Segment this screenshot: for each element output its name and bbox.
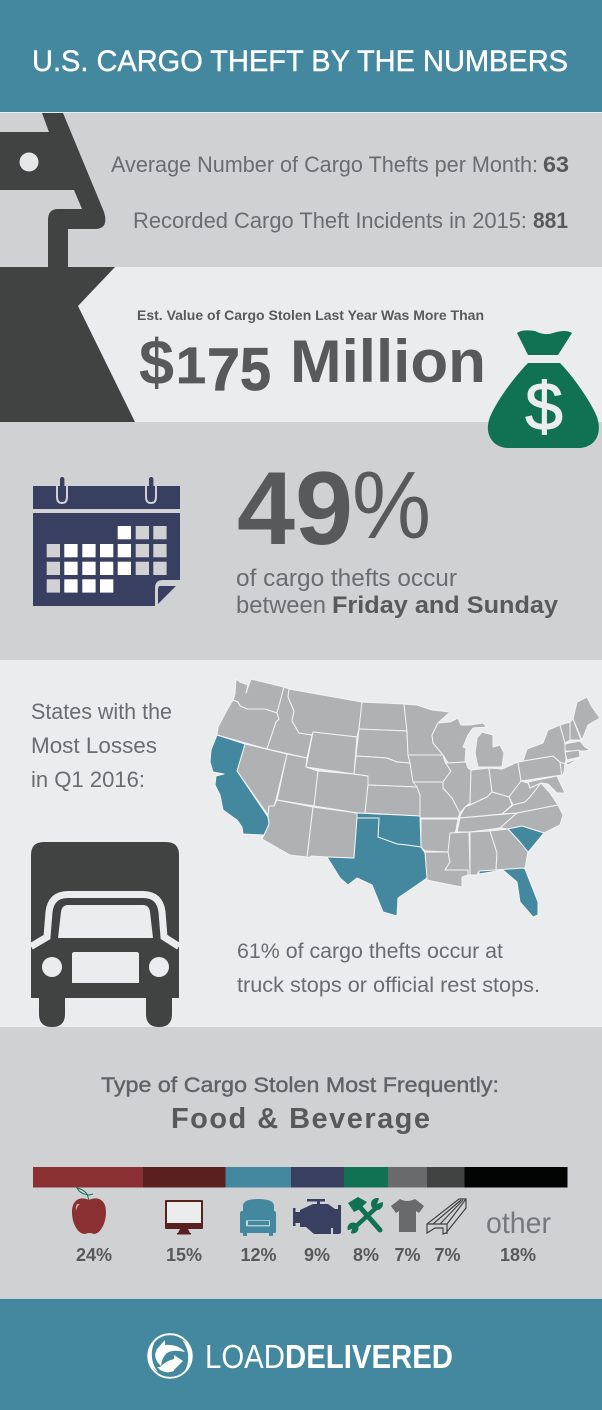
text: states heading — [31, 699, 172, 792]
percent labels: 7% — [394, 1245, 421, 1265]
text: recorded incidents: 881 — [533, 208, 568, 233]
text: value caption: Est. Value of Cargo Stolen Last Year Was More Than — [137, 307, 484, 323]
stat: 49 percent: 49 — [237, 451, 353, 567]
panel: states and rest stops — [0, 660, 602, 1027]
icon: steel beam — [427, 1199, 466, 1234]
icon: truck side silhouette — [0, 113, 135, 422]
icon: truck front — [31, 842, 179, 1027]
stat: 49 percent: % — [352, 452, 431, 559]
text: other label: other — [486, 1207, 551, 1240]
icon: calendar — [33, 477, 180, 606]
text: cargo heading: Type of Cargo Stolen Most Frequently: — [101, 1074, 499, 1097]
text: rest stops statistic: 61% of cargo thefts occur at — [237, 940, 503, 963]
text: rest stops statistic: truck stops or official rest stops. — [237, 974, 540, 997]
stat: 175 million: $ — [139, 326, 174, 398]
stat: 175 million — [139, 326, 486, 403]
icon: money bag: $ — [525, 369, 563, 445]
logo: load delivered — [148, 1334, 453, 1378]
text: recorded incidents: Recorded Cargo Theft Incidents in 2015: — [133, 208, 527, 233]
icon: engine — [293, 1199, 341, 1234]
stat: 175 million: 1 — [176, 337, 206, 394]
text: weekend caption: of cargo thefts occur — [236, 565, 457, 592]
logo: load delivered: DELIVERED — [285, 1338, 453, 1375]
percent labels: 9% — [304, 1245, 330, 1265]
text: weekend caption: Friday and Sunday — [332, 592, 559, 619]
text: weekend caption — [236, 565, 559, 619]
stat: 175 million: 5 — [240, 336, 271, 403]
percent labels: 15% — [166, 1245, 202, 1265]
title: U.S. CARGO THEFT BY THE NUMBERS — [32, 45, 568, 78]
text: rest stops statistic — [237, 940, 540, 997]
text: average thefts per month: 63 — [543, 152, 569, 177]
icon: apple — [72, 1188, 106, 1234]
stat: 175 million: Million — [290, 328, 486, 395]
panel: stolen value — [0, 267, 602, 422]
icon: t-shirt — [391, 1199, 424, 1232]
stat: 175 million: 7 — [207, 336, 240, 403]
chart: U.S. map — [210, 679, 600, 917]
logo: load delivered: LOAD — [205, 1338, 285, 1375]
highlighted states — [210, 735, 544, 917]
icon: armchair — [240, 1199, 276, 1236]
percent labels: 8% — [353, 1245, 379, 1265]
icon: money bag — [488, 330, 599, 448]
percent labels: 7% — [434, 1245, 461, 1265]
text: states heading: States with the — [31, 699, 172, 724]
text: weekend caption: between — [236, 592, 326, 619]
panel: monthly and yearly incidents — [0, 113, 602, 267]
percent labels: 24% — [76, 1245, 112, 1265]
percent labels: 18% — [500, 1245, 536, 1265]
percent labels: 12% — [240, 1245, 277, 1265]
logo mark — [148, 1334, 192, 1378]
panel: header — [0, 0, 602, 112]
text: states heading: Most Losses — [31, 733, 157, 758]
panel: cargo types — [0, 1027, 602, 1298]
stat: 49 percent — [237, 451, 431, 567]
text: average thefts per month: Average Number of Cargo Thefts per Month: — [111, 152, 538, 177]
icon: monitor — [165, 1200, 203, 1234]
panel: footer — [0, 1298, 602, 1410]
chart: stacked cargo bar — [33, 1167, 568, 1188]
text: states heading: in Q1 2016: — [31, 767, 145, 792]
stat: food and beverage: Food & Beverage — [171, 1103, 430, 1135]
percent labels — [76, 1245, 536, 1265]
icon: crossed tools — [345, 1196, 385, 1236]
panel: weekend thefts — [0, 422, 602, 660]
